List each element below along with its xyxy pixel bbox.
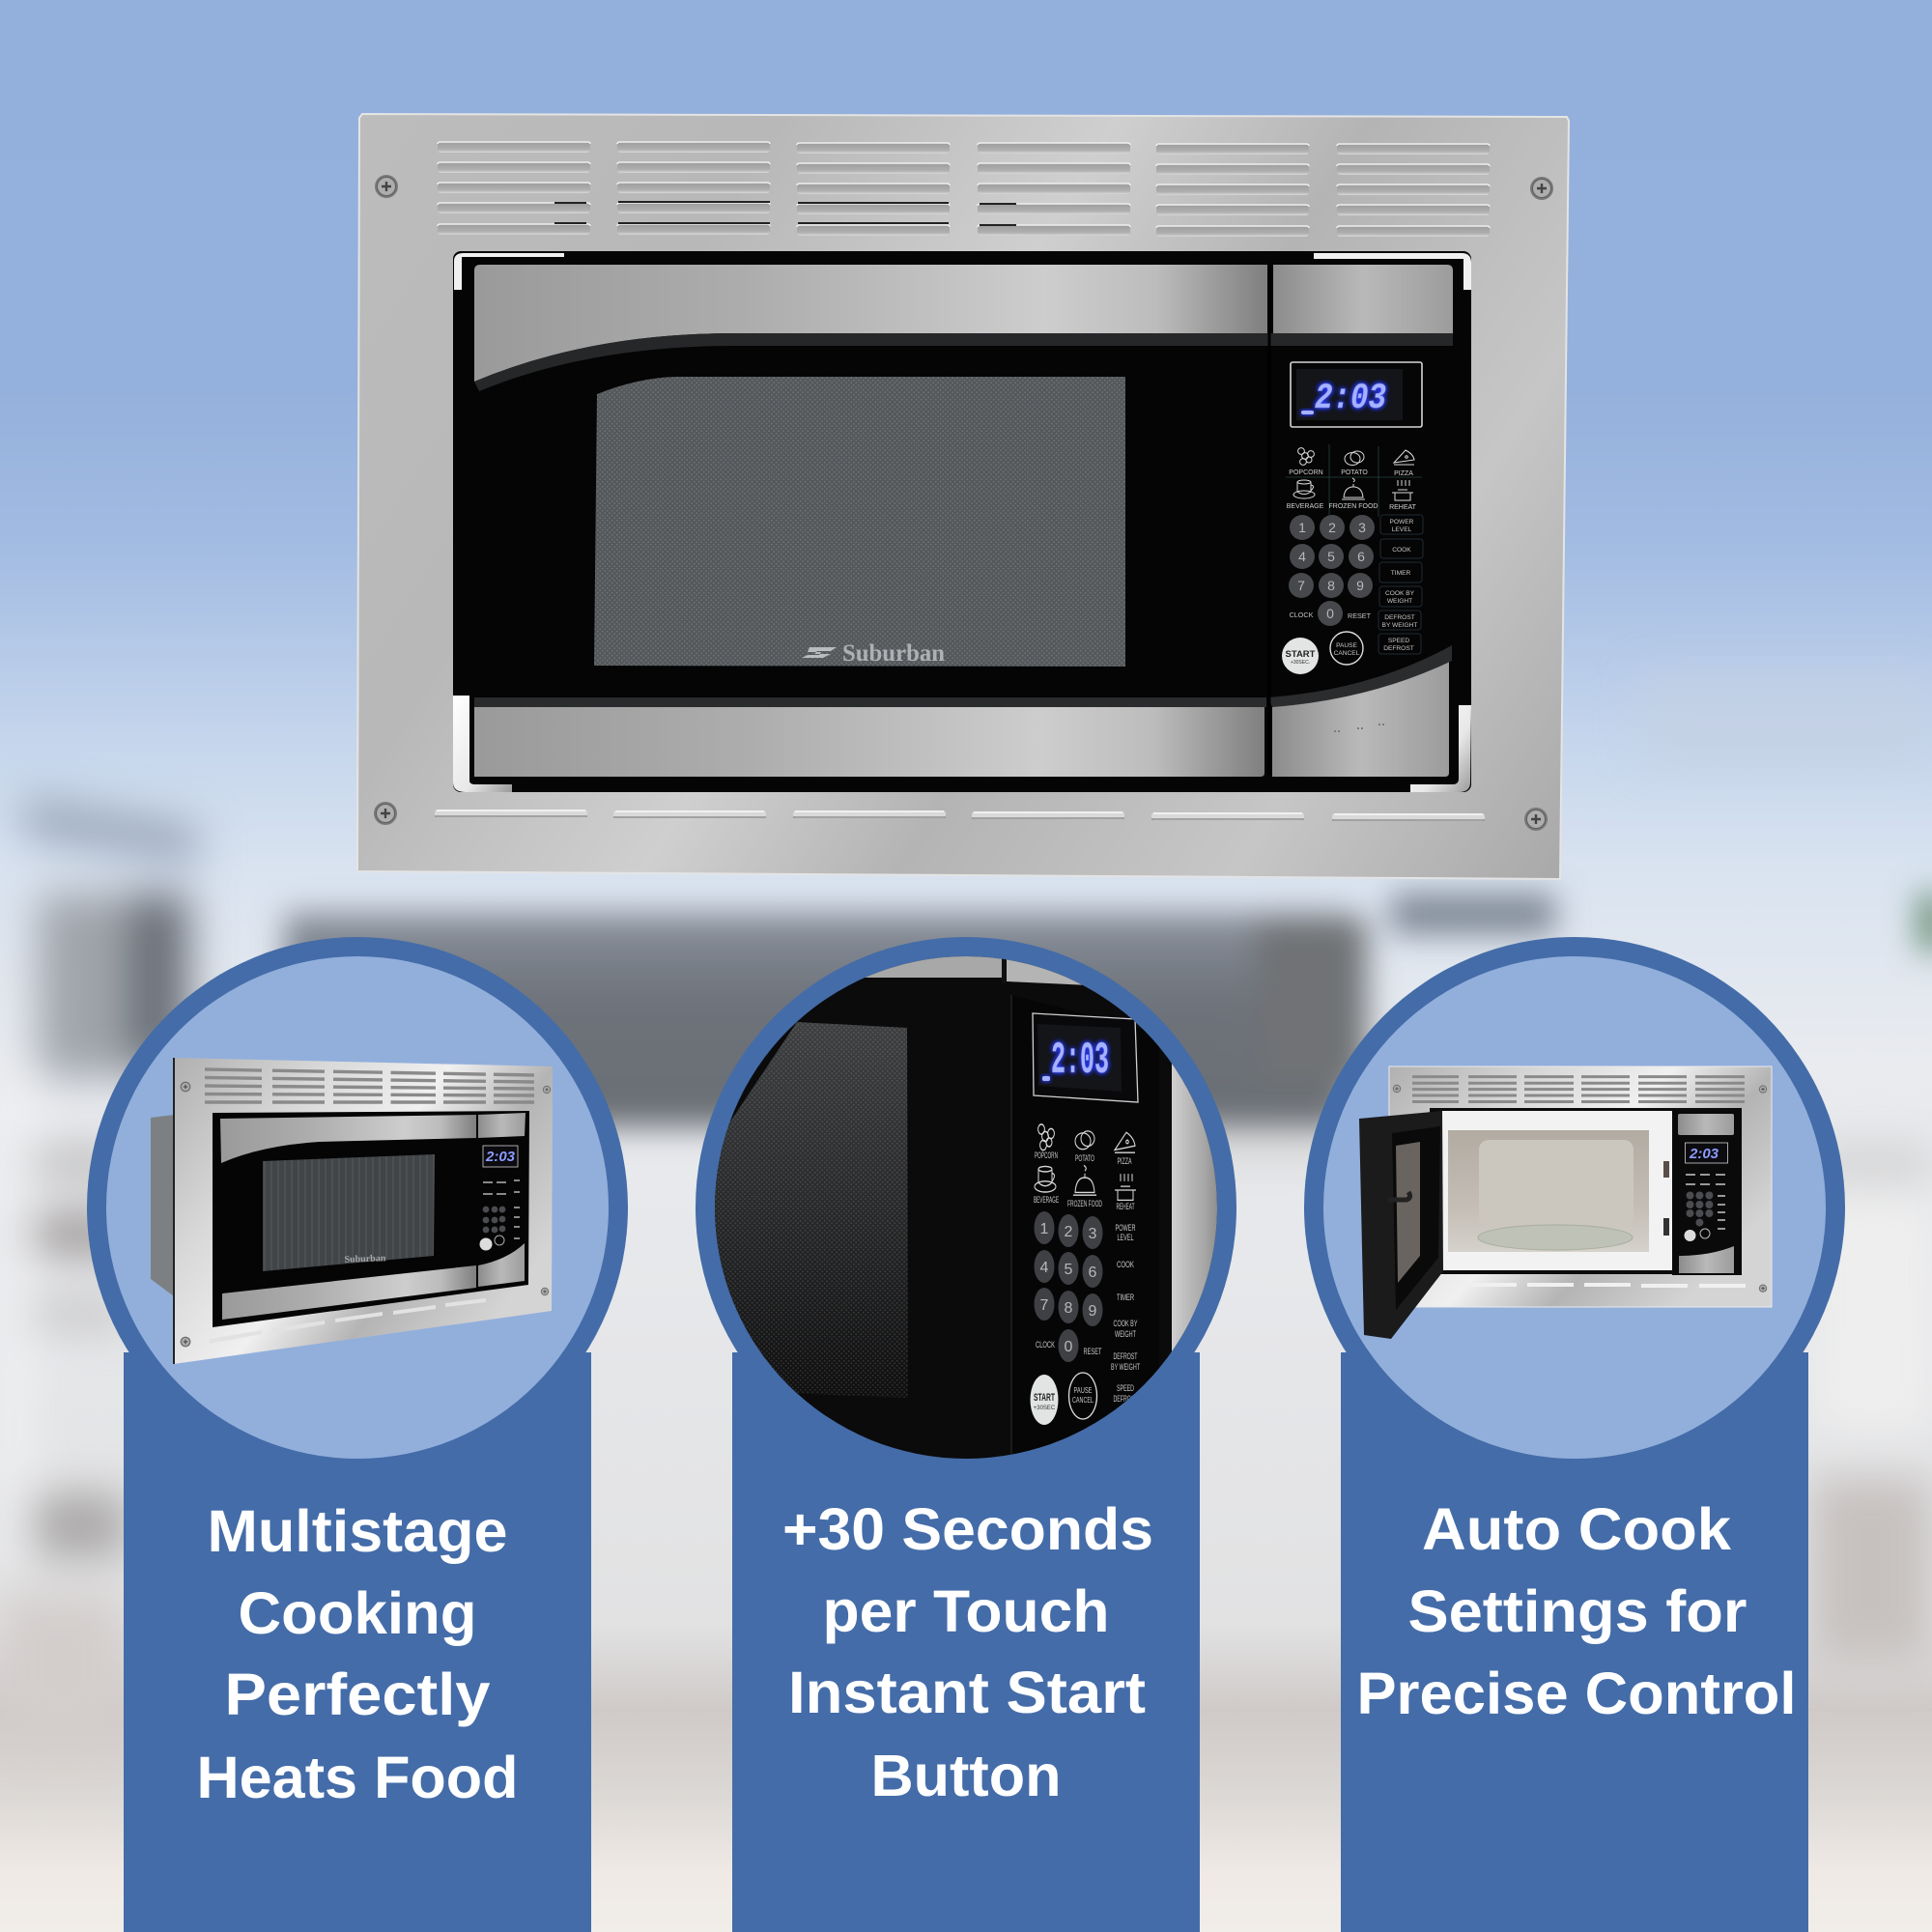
- caption: Perfectly: [224, 1662, 491, 1727]
- function buttons: COOK BY: [1385, 590, 1415, 597]
- caption: Multistage: [207, 1498, 508, 1564]
- caption: [1356, 1496, 1797, 1726]
- pause button: [1068, 1373, 1097, 1419]
- labels: COOK: [1117, 1260, 1134, 1269]
- number keypad: 6: [1357, 549, 1365, 564]
- start button: [1030, 1375, 1059, 1425]
- labels: DEFROST: [1113, 1351, 1138, 1361]
- labels: SPEED: [1117, 1383, 1134, 1393]
- function buttons: SPEED: [1388, 638, 1409, 644]
- labels: PIZZA: [1117, 1156, 1132, 1166]
- caption: +30 Seconds: [782, 1496, 1153, 1562]
- door top silver band: [474, 265, 1267, 382]
- photo: open door microwave: 2:03: [1689, 1146, 1719, 1162]
- logo: Suburban: [842, 640, 945, 667]
- display: [1033, 1013, 1138, 1102]
- number keypad: 7: [1297, 578, 1305, 593]
- labels: POPCORN: [1035, 1151, 1058, 1160]
- caption: Auto Cook: [1422, 1496, 1731, 1562]
- panel: auto cook: [1304, 937, 1845, 1932]
- panel: +30 seconds: [696, 937, 1236, 1932]
- blue column: [732, 1352, 1200, 1932]
- number keypad: 4: [1298, 549, 1306, 564]
- caption: Settings for: [1408, 1578, 1747, 1644]
- start button: +30SEC.: [1291, 660, 1310, 666]
- number keypad: 5: [1327, 549, 1335, 564]
- labels: [1034, 1151, 1140, 1404]
- function buttons: POWER: [1390, 519, 1414, 526]
- ring circle: [87, 937, 628, 1478]
- pause button: CANCEL: [1334, 650, 1360, 657]
- main microwave with trim frame: [357, 114, 1569, 879]
- caption: [197, 1498, 518, 1810]
- keypad: 1: [1040, 1221, 1049, 1237]
- ring circle: [696, 937, 1236, 1478]
- bottom door band: [474, 697, 1266, 777]
- icon buttons: PIZZA: [1394, 470, 1413, 477]
- caption: Button: [871, 1743, 1061, 1808]
- keypad: 6: [1089, 1264, 1097, 1281]
- number keypad: 9: [1356, 578, 1364, 593]
- keypad: 5: [1065, 1262, 1073, 1278]
- control bottom silver: [1272, 661, 1449, 777]
- keypad: 3: [1089, 1226, 1097, 1242]
- pause button: PAUSE: [1336, 642, 1358, 649]
- bottom vents: [435, 810, 1485, 821]
- blue column: [1341, 1352, 1808, 1932]
- photo: open door microwave: [1359, 1066, 1772, 1339]
- cutout with chrome corners: [453, 251, 1471, 792]
- labels: BY WEIGHT: [1111, 1362, 1140, 1372]
- keypad: 7: [1040, 1297, 1049, 1314]
- panel: multistage cooking: [87, 937, 628, 1932]
- function buttons: WEIGHT: [1387, 598, 1412, 605]
- keypad: 2: [1065, 1224, 1073, 1240]
- icon buttons: FROZEN FOOD: [1329, 503, 1378, 510]
- function buttons: LEVEL: [1392, 526, 1412, 533]
- function buttons: DEFROST: [1383, 645, 1414, 652]
- labels: RESET: [1084, 1347, 1102, 1356]
- keypad: 9: [1089, 1303, 1097, 1320]
- control top silver: [1273, 265, 1453, 333]
- function buttons: TIMER: [1391, 570, 1410, 577]
- display: 2:03: [1315, 379, 1386, 419]
- function buttons: DEFROST: [1384, 614, 1415, 621]
- pause button: PAUSE: [1074, 1386, 1092, 1395]
- icon buttons: POPCORN: [1289, 469, 1323, 476]
- photo: angled microwave: 2:03: [485, 1149, 516, 1165]
- labels: POWER: [1115, 1223, 1136, 1233]
- icon buttons: BEVERAGE: [1287, 503, 1324, 510]
- control dots: [1334, 724, 1384, 731]
- top vents: [438, 142, 1490, 237]
- display: [1291, 362, 1422, 427]
- keypad: 0: [1065, 1339, 1073, 1355]
- labels: LEVEL: [1117, 1233, 1134, 1242]
- labels: CLOCK: [1036, 1340, 1055, 1350]
- start button: START: [1034, 1392, 1055, 1404]
- number keypad: 2: [1328, 520, 1336, 535]
- labels: DEFROST: [1113, 1394, 1138, 1404]
- number keypad: CLOCK: [1290, 611, 1314, 619]
- caption: [782, 1496, 1153, 1808]
- function buttons: [1378, 515, 1423, 654]
- inner circle: [1323, 956, 1826, 1459]
- labels: TIMER: [1117, 1293, 1134, 1302]
- start button: +30SEC: [1034, 1406, 1056, 1411]
- caption: Precise Control: [1356, 1661, 1797, 1726]
- number keypad: 1: [1298, 520, 1306, 535]
- ring circle: [1304, 937, 1845, 1478]
- door window: [594, 377, 1125, 667]
- number keypad: 3: [1358, 520, 1366, 535]
- icon buttons: REHEAT: [1389, 504, 1417, 511]
- display: 2:03: [1051, 1036, 1109, 1086]
- pause button: [1330, 632, 1363, 665]
- labels: COOK BY: [1113, 1319, 1138, 1328]
- labels: BEVERAGE: [1034, 1195, 1059, 1205]
- number keypad: 0: [1326, 606, 1334, 621]
- labels: FROZEN FOOD: [1067, 1199, 1102, 1208]
- number keypad: RESET: [1348, 611, 1372, 620]
- icon buttons: POTATO: [1341, 469, 1368, 476]
- start button: [1282, 638, 1319, 674]
- icon buttons: [1286, 444, 1422, 517]
- photo: angled microwave: [151, 1058, 553, 1364]
- labels: WEIGHT: [1115, 1329, 1136, 1339]
- function buttons: COOK: [1392, 547, 1411, 554]
- steel trim frame: [357, 114, 1569, 879]
- caption: Cooking: [238, 1580, 477, 1646]
- keypad: 4: [1040, 1260, 1049, 1276]
- icons: [1035, 1124, 1136, 1200]
- blue column: [124, 1352, 591, 1932]
- keypad: 8: [1065, 1300, 1073, 1317]
- close-up photo of control panel: [705, 942, 1227, 1468]
- caption: per Touch: [823, 1578, 1109, 1644]
- function buttons: BY WEIGHT: [1382, 622, 1417, 629]
- photo: angled microwave: Suburban: [344, 1253, 386, 1265]
- start button: START: [1286, 649, 1316, 660]
- keypad: [1034, 1211, 1103, 1362]
- caption: Heats Food: [197, 1745, 518, 1810]
- inner circle: [106, 956, 609, 1459]
- number keypad: [1289, 515, 1375, 626]
- number keypad: 8: [1327, 578, 1335, 593]
- labels: REHEAT: [1117, 1202, 1135, 1211]
- pause button: CANCEL: [1072, 1396, 1094, 1405]
- screws: [374, 175, 1553, 831]
- caption: Instant Start: [788, 1660, 1146, 1725]
- control panel: [1282, 362, 1423, 674]
- black door curve trim: [474, 333, 1453, 391]
- labels: POTATO: [1075, 1153, 1094, 1163]
